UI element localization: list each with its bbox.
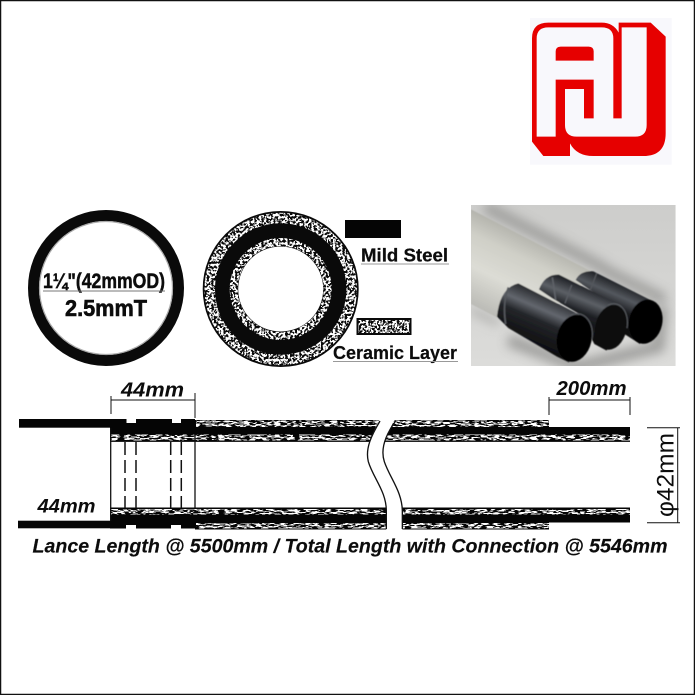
pipe break [367,418,402,532]
coupling outline and hidden lines [111,428,195,521]
legend: mild steel [345,220,449,266]
dimension: 44mm socket: 44mm [36,496,96,518]
thickness label: 2.5mmT [65,295,147,321]
front pipe [497,283,596,365]
right pipe [576,271,667,347]
dimension: 200mm [549,378,630,415]
photo of lance pipes [471,205,676,367]
size label: 1¼"(42mmOD) [43,269,165,293]
caption: Lance Length @ 5500mm / Total Length with Connection @ 5546mm [32,536,668,558]
pipe drawing [18,418,630,532]
pipe section: ceramic lined tube [203,211,359,367]
dimension: 44mm coupling [111,380,195,418]
top wall [19,419,630,442]
legend: ceramic layer [333,318,458,363]
bottom wall [18,508,630,530]
legend: ceramic layer: Ceramic Layer [333,343,457,363]
legend: mild steel: Mild Steel [361,246,448,266]
dimension: 44mm coupling: 44mm [120,380,184,402]
dimension: diameter 42mm: φ42mm [652,433,680,517]
middle pipe [539,275,631,353]
pipe section: steel tube dimensions [34,216,178,360]
dimension: 200mm: 200mm [555,378,626,400]
logo [530,18,672,165]
